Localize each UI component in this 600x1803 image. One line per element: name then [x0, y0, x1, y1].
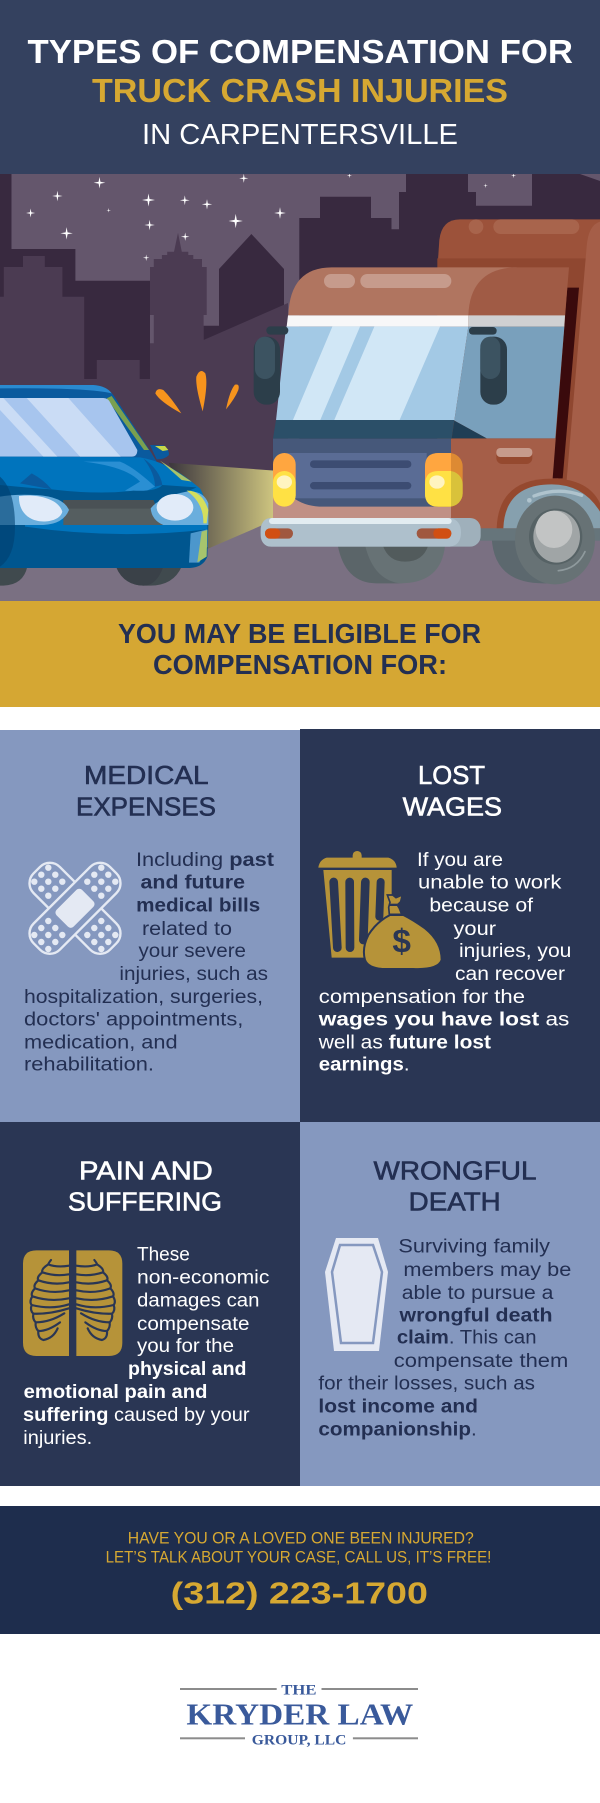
heading: lost wages	[403, 762, 502, 822]
icon: trash can and money bag	[318, 851, 442, 969]
mirrors	[266, 326, 288, 335]
text: lost wages: can recover	[455, 964, 566, 985]
heading: wrongful death: DEATH	[409, 1188, 501, 1216]
phone number: (312) 223-1700	[171, 1575, 428, 1610]
text: wrongful death: wrongful death	[398, 1306, 552, 1327]
call to action text: LET’S TALK ABOUT YOUR CASE, CALL US, IT’S FREE!	[106, 1548, 491, 1566]
heading: lost wages: WAGES	[403, 794, 502, 822]
logo: the kryder law group: GROUP, LLC	[252, 1733, 346, 1749]
heading: pain and suffering: PAIN AND	[79, 1157, 213, 1185]
bumper	[261, 518, 481, 547]
title line 3: IN CARPENTERSVILLE	[142, 119, 458, 151]
call to action text	[106, 1529, 491, 1566]
text: lost wages: well as future lost	[318, 1033, 492, 1054]
panel: medical expenses	[0, 730, 300, 1122]
title line 1: TYPES OF COMPENSATION FOR	[28, 33, 573, 70]
logo: the kryder law group: THE	[281, 1683, 316, 1699]
panel: header	[0, 0, 600, 174]
text: pain and suffering: injuries.	[23, 1428, 92, 1449]
skyline mid layer	[0, 233, 288, 560]
text: medical expenses	[24, 850, 275, 1076]
car and sparks	[0, 371, 239, 586]
text: wrongful death: companionship .	[318, 1419, 477, 1440]
heading: wrongful death	[374, 1157, 536, 1216]
panel: call to action	[0, 1506, 600, 1634]
text: wrongful death: lost income and	[318, 1397, 478, 1418]
text: lost wages: earnings .	[319, 1055, 410, 1076]
text: wrongful death: able to pursue a	[402, 1283, 554, 1304]
text: medical expenses: medical bills	[136, 896, 260, 917]
heading: medical expenses	[76, 762, 216, 822]
text: wrongful death: claim. This can	[397, 1328, 536, 1349]
illustration: truck and car at night	[0, 173, 600, 601]
text: medical expenses: rehabilitation.	[24, 1055, 154, 1076]
light beam	[169, 463, 273, 549]
text: wrongful death: members may be	[403, 1260, 571, 1281]
panel: pain and suffering	[0, 1122, 300, 1486]
text: lost wages: unable to work	[418, 873, 562, 894]
icon: coffin	[325, 1238, 388, 1351]
text: medical expenses: your severe	[138, 941, 246, 962]
text: wrongful death: Surviving family	[398, 1237, 551, 1258]
text: lost wages: injuries, you	[459, 941, 571, 962]
text: pain and suffering: suffering caused by your	[23, 1405, 250, 1426]
text: pain and suffering: These	[137, 1245, 190, 1266]
heading: pain and suffering: SUFFERING	[68, 1188, 222, 1216]
text: pain and suffering: non-economic	[137, 1268, 269, 1289]
text: medical expenses: doctors' appointments,	[24, 1010, 243, 1031]
text: pain and suffering: physical and	[128, 1359, 246, 1380]
heading: medical expenses: MEDICAL	[84, 762, 209, 790]
text: medical expenses: medication, and	[24, 1033, 178, 1054]
text: pain and suffering: damages can	[137, 1291, 260, 1312]
text: medical expenses: and future	[140, 873, 245, 894]
panel: wrongful death	[300, 1122, 600, 1486]
icon: rib cage	[23, 1250, 122, 1356]
headlights	[273, 453, 296, 507]
text: medical expenses: related to	[142, 919, 232, 940]
text: medical expenses: Including past	[136, 850, 275, 871]
title line 2: TRUCK CRASH INJURIES	[92, 72, 508, 109]
text: pain and suffering	[23, 1245, 269, 1449]
text: lost wages: If you are	[417, 850, 503, 871]
text: medical expenses: injuries, such as	[119, 964, 268, 985]
text: pain and suffering: you for the	[137, 1336, 234, 1357]
text: lost wages: your	[454, 919, 497, 940]
wheels	[338, 545, 445, 583]
text: wrongful death	[318, 1237, 571, 1440]
heading: pain and suffering	[68, 1157, 222, 1216]
icon: crossed bandages	[24, 857, 126, 960]
logo: the kryder law group	[180, 1683, 418, 1749]
call to action text: HAVE YOU OR A LOVED ONE BEEN INJURED?	[128, 1529, 474, 1547]
banner: you may be eligible: YOU MAY BE ELIGIBLE FOR	[118, 618, 481, 649]
icon: trash can and money bag: $	[392, 924, 411, 961]
heading: wrongful death: WRONGFUL	[374, 1157, 536, 1185]
text: wrongful death: for their losses, such as	[318, 1374, 535, 1395]
truck	[254, 219, 600, 584]
cab	[288, 267, 517, 315]
skyline dark layer	[0, 174, 600, 440]
text: lost wages: wages you have lost as	[318, 1010, 569, 1031]
sparks	[155, 371, 239, 413]
stars	[26, 173, 516, 261]
text: wrongful death: compensate them	[394, 1351, 568, 1372]
text: pain and suffering: emotional pain and	[24, 1382, 207, 1403]
text: medical expenses: hospitalization, surgeries,	[24, 987, 263, 1008]
logo: the kryder law group: KRYDER LAW	[186, 1697, 413, 1732]
heading: lost wages: LOST	[418, 762, 485, 790]
text: lost wages	[318, 850, 571, 1076]
text: lost wages: compensation for the	[319, 987, 525, 1008]
heading: medical expenses: EXPENSES	[76, 794, 216, 822]
panel: lost wages	[300, 729, 600, 1122]
text: pain and suffering: compensate	[137, 1314, 250, 1335]
text: lost wages: because of	[429, 896, 534, 917]
banner: you may be eligible: COMPENSATION FOR:	[153, 649, 447, 680]
banner: you may be eligible	[0, 601, 600, 707]
road	[0, 520, 600, 601]
